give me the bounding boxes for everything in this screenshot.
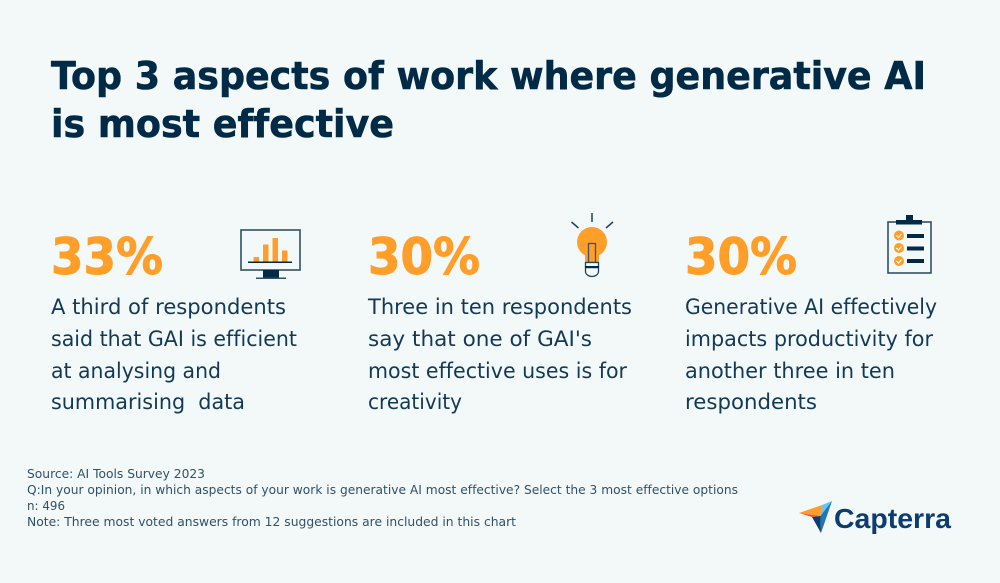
icon: Capterra arrow [799, 501, 832, 533]
description: Three in ten respondents [367, 295, 632, 319]
description: say that one of GAI's [368, 327, 592, 351]
icon: monitor with bar chart [241, 230, 300, 279]
icon: clipboard checklist [888, 215, 931, 273]
title [51, 54, 926, 147]
stat: 30%: 30% [368, 228, 480, 286]
panel: creativity [367, 213, 632, 414]
panel: data analysis [51, 228, 300, 414]
description: another three in ten [685, 359, 895, 383]
stat: 33%: 33% [51, 228, 163, 286]
icon: light bulb [572, 213, 613, 276]
description: respondents [685, 390, 817, 414]
description: A third of respondents [51, 295, 286, 319]
title: Top 3 aspects of work where generative AI [51, 54, 926, 99]
logo: Capterra: Capterra [834, 503, 951, 534]
description: most effective uses is for [368, 359, 627, 383]
description: creativity [368, 390, 462, 414]
title: is most effective [51, 102, 394, 147]
source notes: n: 496 [27, 498, 65, 513]
description [51, 295, 297, 414]
description [367, 295, 632, 414]
description: Generative AI effectively [685, 295, 937, 319]
source notes [27, 466, 738, 529]
description [685, 295, 937, 414]
description: impacts productivity for [685, 327, 933, 351]
stat: 30%: 30% [685, 228, 797, 286]
panel: productivity [685, 215, 937, 414]
description: at analysing and [51, 359, 221, 383]
description: summarising data [51, 390, 245, 414]
source notes: Source: AI Tools Survey 2023 [27, 466, 205, 481]
description: said that GAI is efficient [51, 327, 297, 351]
source notes: Note: Three most voted answers from 12 suggestions are included in this chart [27, 514, 516, 529]
source notes: Q:In your opinion, in which aspects of your work is generative AI most effective? Select the 3 most effective options [27, 482, 738, 497]
